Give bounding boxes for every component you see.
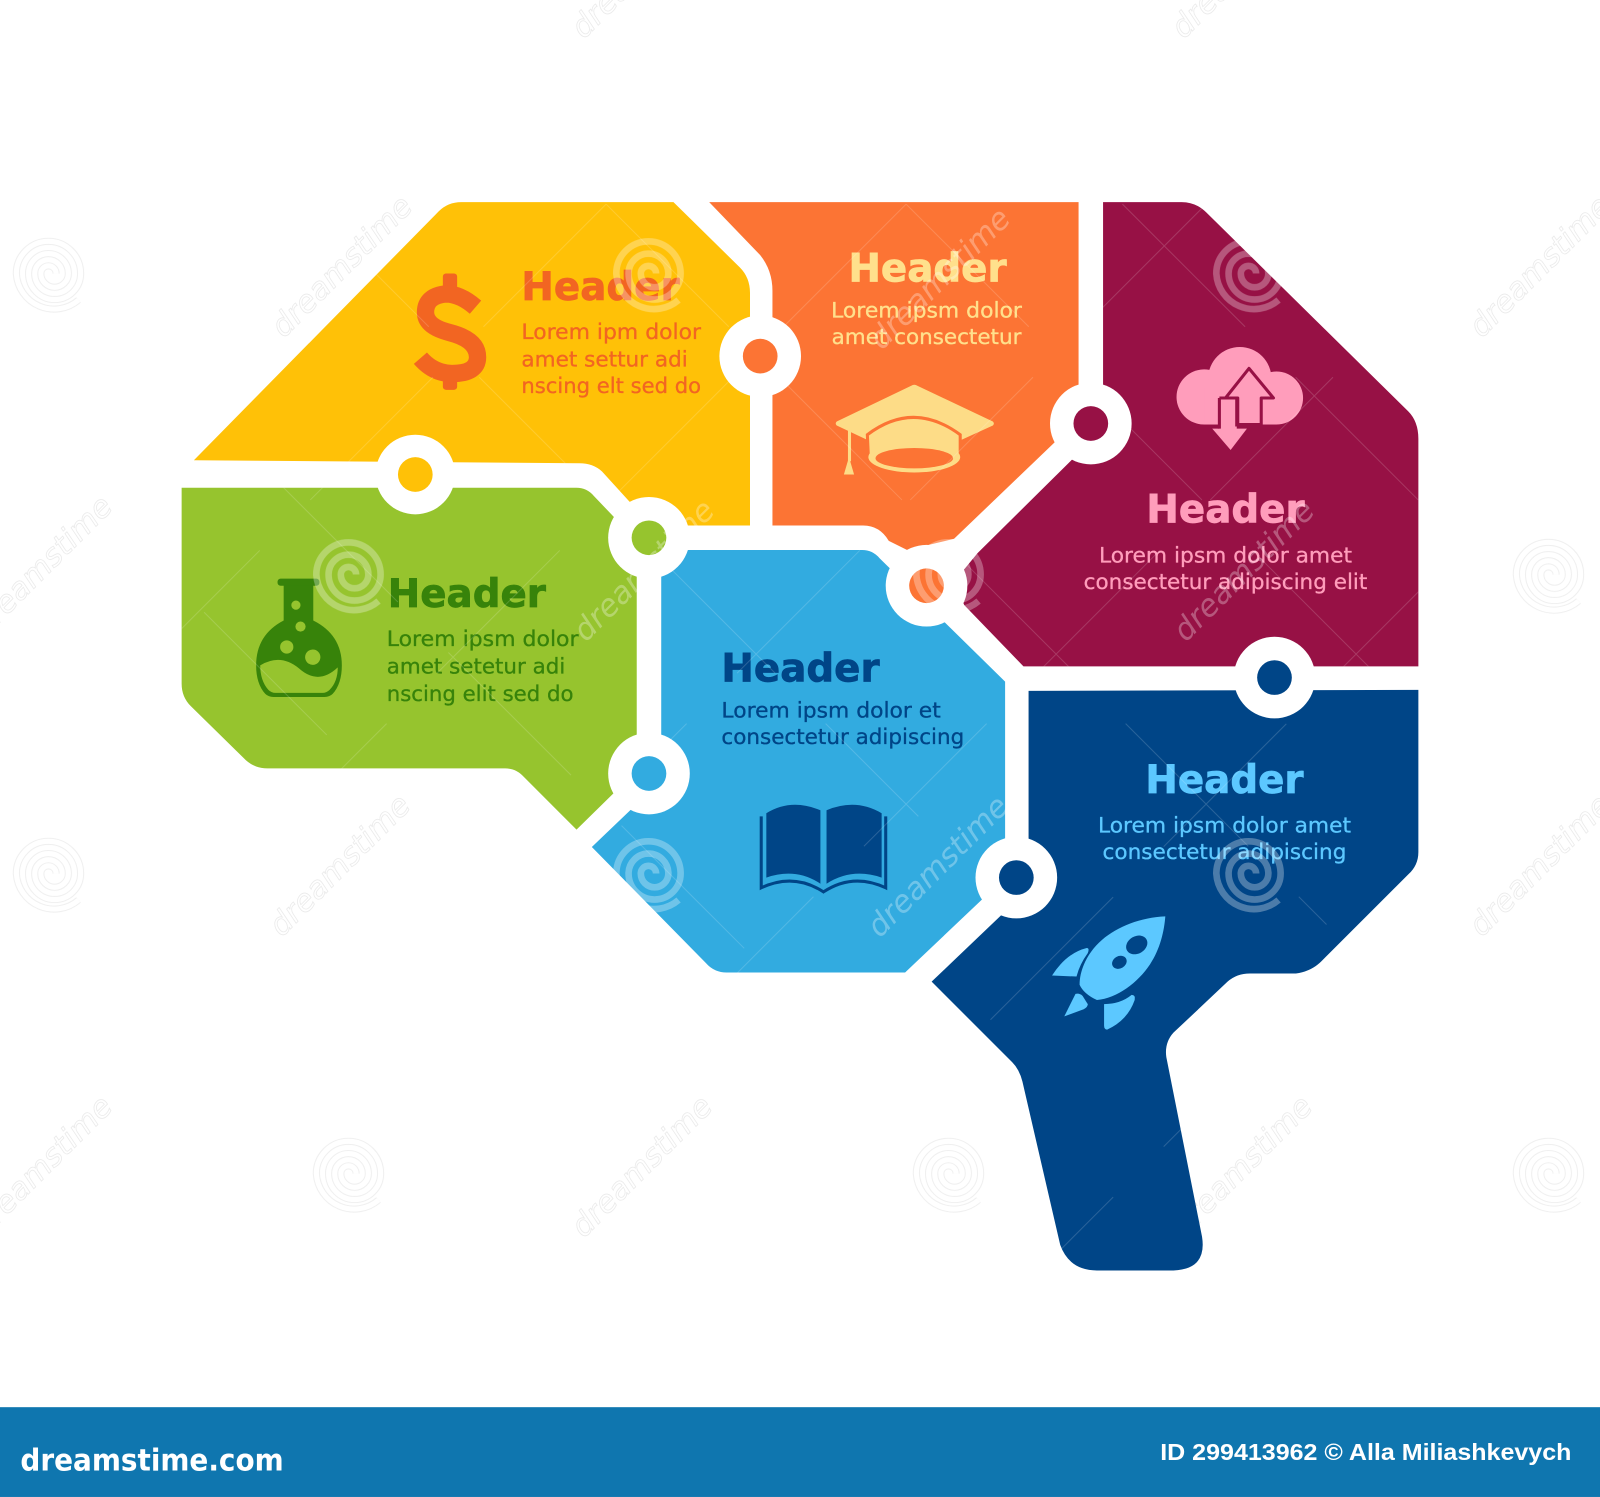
node: light blue (608, 733, 690, 814)
panel overlay lines (182, 204, 1418, 1249)
body text: maroon panel (1084, 543, 1367, 594)
header: yellow panel: Header (521, 265, 680, 310)
icon: graduation cap (836, 385, 994, 475)
icon: cloud with arrows (1177, 347, 1303, 450)
overlay watermarks: dreamstime (1167, 493, 1322, 648)
background watermarks: dreamstime (565, 1089, 720, 1244)
icon: rocket (1052, 916, 1165, 1030)
background watermarks: dreamstime (265, 189, 420, 344)
panel: navy rocket (932, 690, 1418, 1270)
body text: green panel: amet setetur adi (387, 655, 565, 679)
node: yellow (376, 435, 455, 514)
body text: green panel: Lorem ipsm dolor (387, 627, 579, 651)
node: maroon (1050, 383, 1132, 464)
footer logo: dreamstime.com (20, 1443, 284, 1478)
body text: yellow panel: amet settur adi (521, 347, 688, 371)
panel: maroon cloud (954, 202, 1418, 666)
body text: yellow panel: Lorem ipm dolor (521, 320, 701, 344)
background watermarks: dreamstime (263, 788, 418, 943)
background watermarks: dreamstime (1165, 1089, 1320, 1244)
panel: blue book (592, 550, 1005, 972)
body text: blue panel (721, 698, 964, 749)
icon: flask (256, 579, 342, 697)
body text: yellow panel: nscing elt sed do (521, 374, 701, 398)
body text: green panel: nscing elit sed do (387, 682, 573, 706)
panel: orange education (709, 202, 1079, 550)
header: green panel: Header (388, 572, 546, 617)
node: navy lower (976, 837, 1057, 918)
header: maroon panel: Header (1146, 487, 1305, 532)
body text: orange panel: amet consectetur (832, 325, 1022, 349)
header: orange panel: Header (848, 247, 1007, 292)
panel: yellow finance (194, 202, 750, 526)
footer credit: ID 299413962 © Alla Miliashkevych (1160, 1439, 1571, 1465)
overlay watermarks: dreamstime (567, 493, 722, 648)
header: navy panel: Header (1145, 758, 1304, 803)
footer bar (0, 1407, 1600, 1497)
header: blue panel: Header (721, 647, 880, 692)
body text: navy panel (1098, 814, 1351, 864)
node: green (608, 497, 690, 579)
body text: maroon panel: Lorem ipsm dolor amet (1099, 543, 1352, 567)
icon: dollar sign (420, 274, 478, 390)
overlay watermarks: dreamstime (861, 789, 1016, 944)
body text: green panel (387, 627, 579, 706)
icon: open book (761, 805, 886, 892)
node: orange center (886, 545, 967, 627)
node: orange top (719, 315, 801, 397)
body text: yellow panel (521, 320, 701, 398)
body text: orange panel (831, 298, 1022, 349)
body text: blue panel: consectetur adipiscing (721, 725, 964, 749)
body text: orange panel: Lorem ipsm dolor (831, 298, 1022, 322)
panel: green science (182, 488, 637, 830)
overlay watermarks (316, 201, 1322, 944)
body text: blue panel: Lorem ipsm dolor et (721, 698, 941, 722)
node: navy right (1234, 637, 1315, 718)
body text: navy panel: Lorem ipsm dolor amet (1098, 814, 1351, 838)
body text: maroon panel: consectetur adipiscing elit (1084, 570, 1367, 594)
overlay watermarks: dreamstime (863, 201, 1018, 357)
body text: navy panel: consectetur adipiscing (1103, 840, 1346, 864)
